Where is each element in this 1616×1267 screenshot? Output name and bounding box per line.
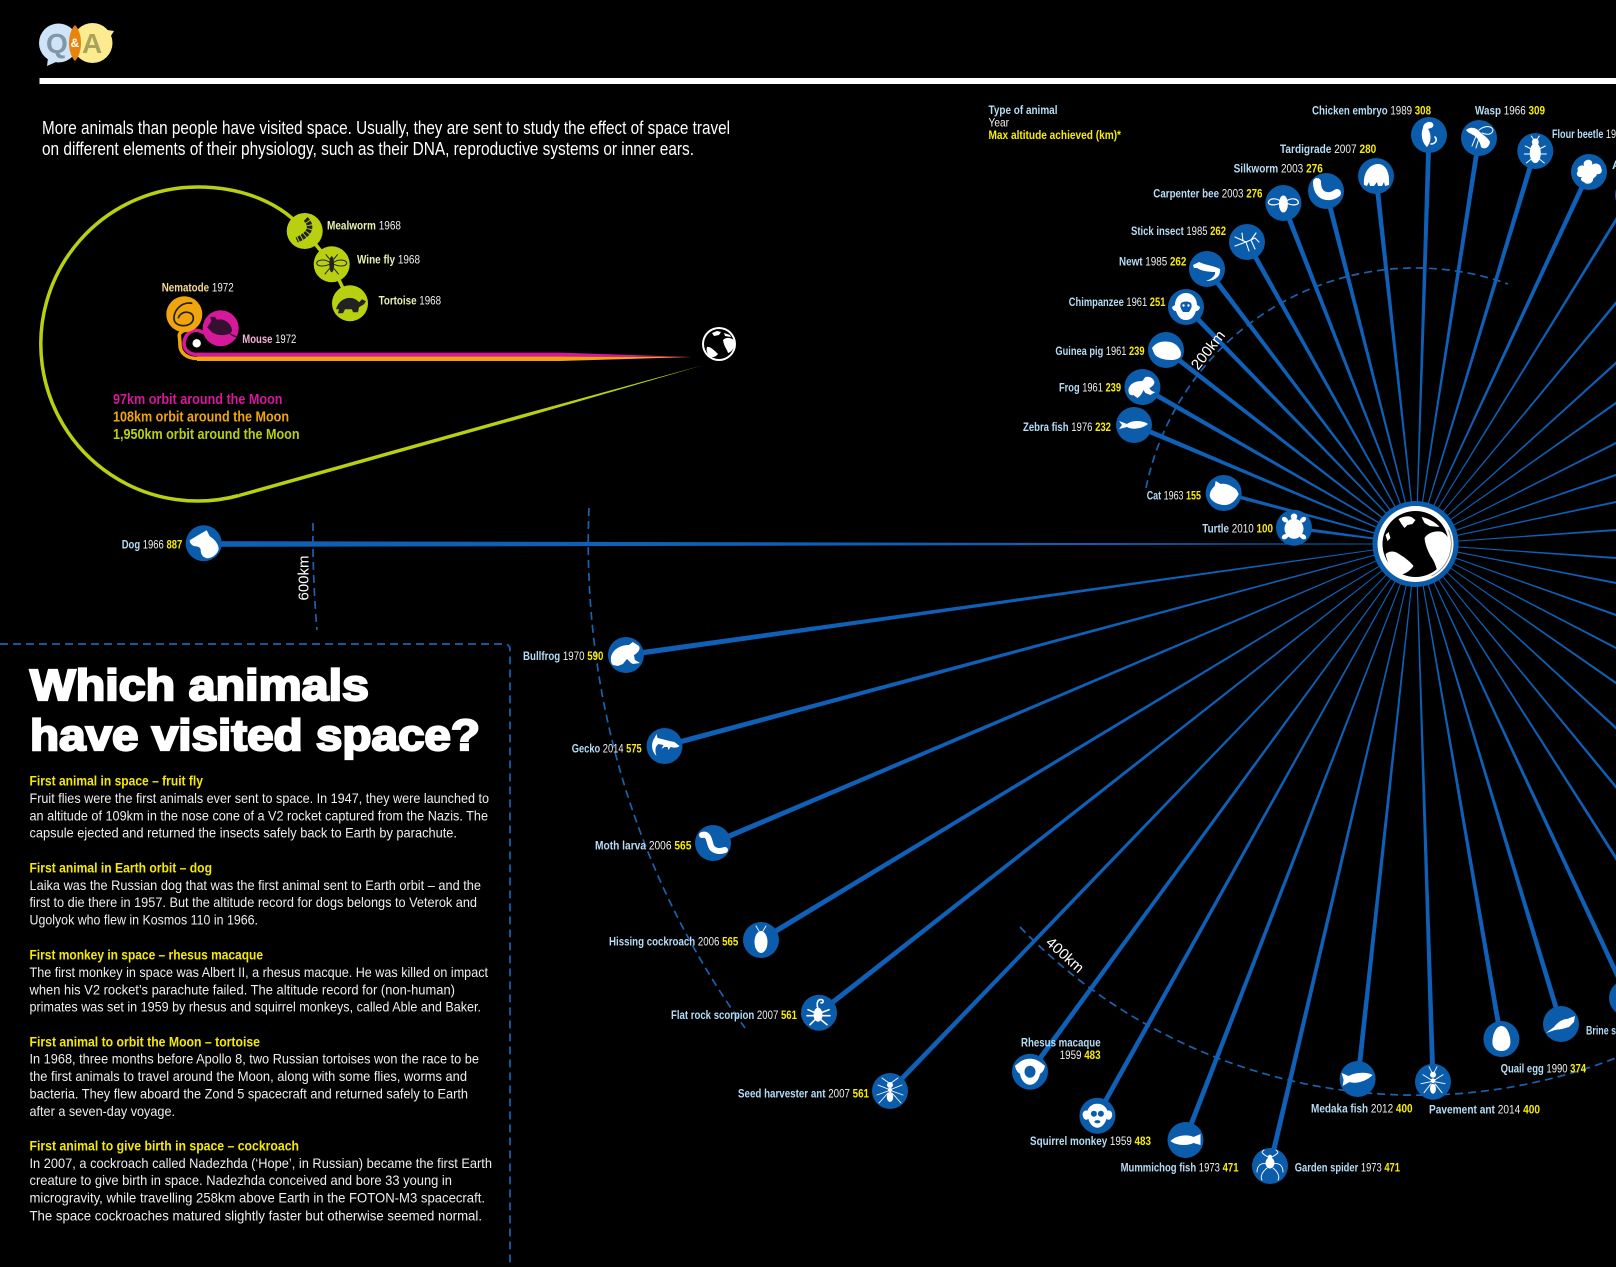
label: Wine fly: Wine fly 1968 <box>357 253 420 267</box>
icon: dog <box>186 525 222 561</box>
label: Garden spider: Garden spider 1973 471 <box>1295 1160 1400 1174</box>
icon: squirrel monkey <box>1079 1098 1115 1134</box>
intro text: More animals than people have visited space. Usually, they are sent to study the effect of space travel <box>42 118 730 138</box>
icon: brine shrimp <box>1543 1006 1579 1042</box>
text block: cockroach: creature to give birth in space. Nadezhda conceived and bore 33 young in <box>30 1173 452 1188</box>
icon: amoeba-like animal <box>1571 154 1607 190</box>
text block: fruit fly: First animal in space – fruit fly <box>30 774 203 788</box>
text block: fruit fly: Fruit flies were the first animals ever sent to space. In 1947, they were launched to <box>30 791 489 806</box>
label: Chimpanzee: Chimpanzee 1961 251 <box>1069 295 1166 309</box>
text block: tortoise: In 1968, three months before Apollo 8, two Russian tortoises won the race to be <box>30 1052 479 1066</box>
text block: dog: first to die there in 1957. But the altitude record for dogs belongs to Veterok and <box>30 895 477 910</box>
label: Carpenter bee: Carpenter bee 2003 276 <box>1153 187 1263 201</box>
label: Dog: Dog 1966 887 <box>122 537 183 551</box>
label: Wasp: Wasp 1966 309 <box>1475 103 1545 117</box>
icon: tardigrade <box>1358 158 1394 194</box>
text block: rhesus macaque: First monkey in space – rhesus macaque <box>30 948 263 962</box>
orbit path: 1,950km lime <box>41 187 702 501</box>
text block: rhesus macaque: primates was set in 1959 by rhesus and squirrel monkeys, called Able and Baker. <box>30 1000 481 1014</box>
icon: chimpanzee <box>1168 289 1204 325</box>
label: Mealworm: Mealworm 1968 <box>327 218 401 232</box>
icon: quail egg <box>1483 1021 1519 1057</box>
icon: cat <box>1206 475 1242 511</box>
label: Gecko: Gecko 2014 575 <box>572 741 642 755</box>
legend: orbits: 97km orbit around the Moon <box>113 392 282 408</box>
icon: rhesus macaque <box>1012 1054 1048 1090</box>
icon: off-page animal at right edge <box>1615 177 1616 213</box>
label: Medaka fish: Medaka fish 2012 400 <box>1311 1102 1413 1116</box>
label: Moth larva: Moth larva 2006 565 <box>595 838 692 852</box>
icon: gecko <box>646 728 682 764</box>
text block: fruit fly <box>30 774 489 840</box>
icon: Q&A logo: & <box>70 36 80 50</box>
header rule <box>40 78 1616 84</box>
text block: cockroach: In 2007, a cockroach called Nadezhda (‘Hope’, in Russian) became the first Earth <box>30 1156 492 1171</box>
label: Flat rock scorpion: Flat rock scorpion 2007 561 <box>671 1008 797 1022</box>
icon: stick insect <box>1229 224 1265 260</box>
label: Squirrel monkey: Squirrel monkey 1959 483 <box>1030 1134 1151 1148</box>
text block: rhesus macaque: when his V2 rocket’s parachute failed. The altitude record for (non-human) <box>29 982 455 997</box>
text block: dog: First animal in Earth orbit – dog <box>30 860 212 876</box>
altitude arc: 200km <box>1146 268 1508 488</box>
icon: flour beetle <box>1517 133 1553 169</box>
label: Rhesus macaque: 1959 483 <box>1060 1048 1101 1062</box>
label: Tortoise: Tortoise 1968 <box>379 294 441 308</box>
label: Tardigrade: Tardigrade 2007 280 <box>1280 142 1377 156</box>
icon: guinea pig <box>1148 332 1184 368</box>
icon: Moon dot <box>192 339 201 347</box>
label: 600km: 600km <box>295 555 312 601</box>
text block: dog: Ugolyok who flew in Kosmos 110 in 1966. <box>30 912 258 928</box>
icon: mouse <box>203 310 239 346</box>
label: Pavement ant: Pavement ant 2014 400 <box>1429 1102 1540 1116</box>
icon: medaka fish <box>1340 1061 1376 1097</box>
legend: orbits: 1,950km orbit around the Moon <box>113 427 300 443</box>
legend: key: Year <box>988 116 1009 130</box>
icon: chicken embryo <box>1411 117 1447 153</box>
legend: key: Max altitude achieved (km)* <box>988 128 1121 142</box>
text block: tortoise <box>30 1034 479 1119</box>
text block: tortoise: First animal to orbit the Moon – tortoise <box>30 1034 260 1050</box>
label: Frog: Frog 1961 239 <box>1059 380 1121 394</box>
label: Rhesus macaque: Rhesus macaque <box>1021 1036 1101 1050</box>
text block: cockroach <box>30 1138 492 1224</box>
icon: flat rock scorpion <box>801 995 837 1031</box>
text block: fruit fly: an altitude of 109km in the nose cone of a V2 rocket captured from the Nazis. The <box>30 808 488 824</box>
altitude arc: outer <box>313 523 317 630</box>
icon: mummichog fish <box>1168 1122 1204 1158</box>
text block: tortoise: bacteria. They flew aboard the Zond 5 spacecraft and returned safely to Earth <box>30 1086 468 1102</box>
legend: key <box>988 103 1121 142</box>
label: Chicken embryo: Chicken embryo 1989 308 <box>1312 103 1431 117</box>
icon: Q&A logo <box>39 23 114 66</box>
icon: bullfrog <box>608 637 644 673</box>
legend: orbits: 108km orbit around the Moon <box>113 410 289 426</box>
heading <box>30 661 480 760</box>
text block: dog <box>30 860 481 928</box>
icon: Earth <box>1372 501 1458 587</box>
icon: mealworm <box>287 213 323 249</box>
icon: silkworm <box>1308 173 1344 209</box>
altitude arc: inner long <box>588 508 745 1028</box>
icon: small Earth <box>702 327 736 361</box>
icon: carpenter bee <box>1265 185 1301 221</box>
label: Stick insect: Stick insect 1985 262 <box>1131 224 1226 238</box>
label: Mouse: Mouse 1972 <box>242 332 297 346</box>
orbit path: 108km orange <box>179 331 692 361</box>
text block: cockroach: First animal to give birth in space – cockroach <box>30 1138 299 1154</box>
label: Hissing cockroach: Hissing cockroach 2006 565 <box>609 935 739 949</box>
label: 200km: 200km <box>1188 327 1229 373</box>
text block: dog: Laika was the Russian dog that was the first animal sent to Earth orbit – and the <box>30 878 481 893</box>
intro text <box>42 118 730 159</box>
intro text: on different elements of their physiology, such as their DNA, reproductive systems or inner ears. <box>42 139 694 159</box>
icon: off-page animal at lower right <box>1609 980 1616 1016</box>
legend: orbits <box>113 392 300 443</box>
label: Quail egg: Quail egg 1990 374 <box>1501 1061 1586 1075</box>
icon: wine fly <box>314 246 350 282</box>
label: Guinea pig: Guinea pig 1961 239 <box>1055 344 1145 358</box>
icon: wasp <box>1461 120 1497 156</box>
panel: text panel <box>0 644 510 1267</box>
orbit path: 97km magenta <box>184 330 692 357</box>
label: Mummichog fish: Mummichog fish 1973 471 <box>1121 1161 1239 1175</box>
label: 400km: 400km <box>1042 934 1087 977</box>
text block: fruit fly: capsule ejected and returned the insects safely back to Earth by parachute. <box>30 826 457 840</box>
text block: tortoise: the first animals to travel around the Moon, along with some flies, worms and <box>30 1069 467 1084</box>
label: Cat: Cat 1963 155 <box>1147 488 1201 502</box>
chart: Moon orbit paths <box>41 187 736 501</box>
label: Bullfrog: Bullfrog 1970 590 <box>523 649 604 663</box>
label: Nematode: Nematode 1972 <box>162 281 234 295</box>
icon: garden spider <box>1252 1148 1288 1184</box>
icon: moth larva <box>695 825 731 861</box>
label: Zebra fish: Zebra fish 1976 232 <box>1023 420 1111 434</box>
altitude arc: 400km <box>1020 927 1616 1095</box>
text block: cockroach: microgravity, while travelling 258km above Earth in the FOTON-M3 spacecraft. <box>30 1190 485 1206</box>
icon: tortoise <box>332 285 368 321</box>
label: Newt: Newt 1985 262 <box>1119 255 1187 269</box>
heading: have visited space? <box>30 711 480 760</box>
icon: seed harvester ant <box>872 1073 908 1109</box>
text block: tortoise: after a seven-day voyage. <box>30 1104 175 1119</box>
heading: Which animals <box>30 661 369 710</box>
label: Turtle: Turtle 2010 100 <box>1202 522 1273 536</box>
icon: Q&A logo: Q <box>46 28 68 59</box>
legend: key: Type of animal <box>988 103 1058 117</box>
text block: cockroach: The space cockroaches matured slightly faster but otherwise seemed normal. <box>30 1208 482 1224</box>
icon: Q&A logo: A <box>82 28 102 59</box>
text block: rhesus macaque: The first monkey in space was Albert II, a rhesus macque. He was killed on impact <box>30 965 488 980</box>
label: Seed harvester ant: Seed harvester ant 2007 561 <box>738 1087 869 1101</box>
icon: frog <box>1124 369 1160 405</box>
icon: pavement ant <box>1415 1064 1451 1100</box>
icon: zebra fish <box>1116 407 1152 443</box>
label: Silkworm: Silkworm 2003 276 <box>1234 161 1323 175</box>
text block: rhesus macaque <box>29 948 488 1014</box>
icon: turtle <box>1276 510 1312 546</box>
label: Rhesus macaque <box>1021 1036 1101 1062</box>
icon: nematode <box>166 296 202 332</box>
icon: newt <box>1189 251 1225 287</box>
icon: hissing cockroach <box>743 922 779 958</box>
